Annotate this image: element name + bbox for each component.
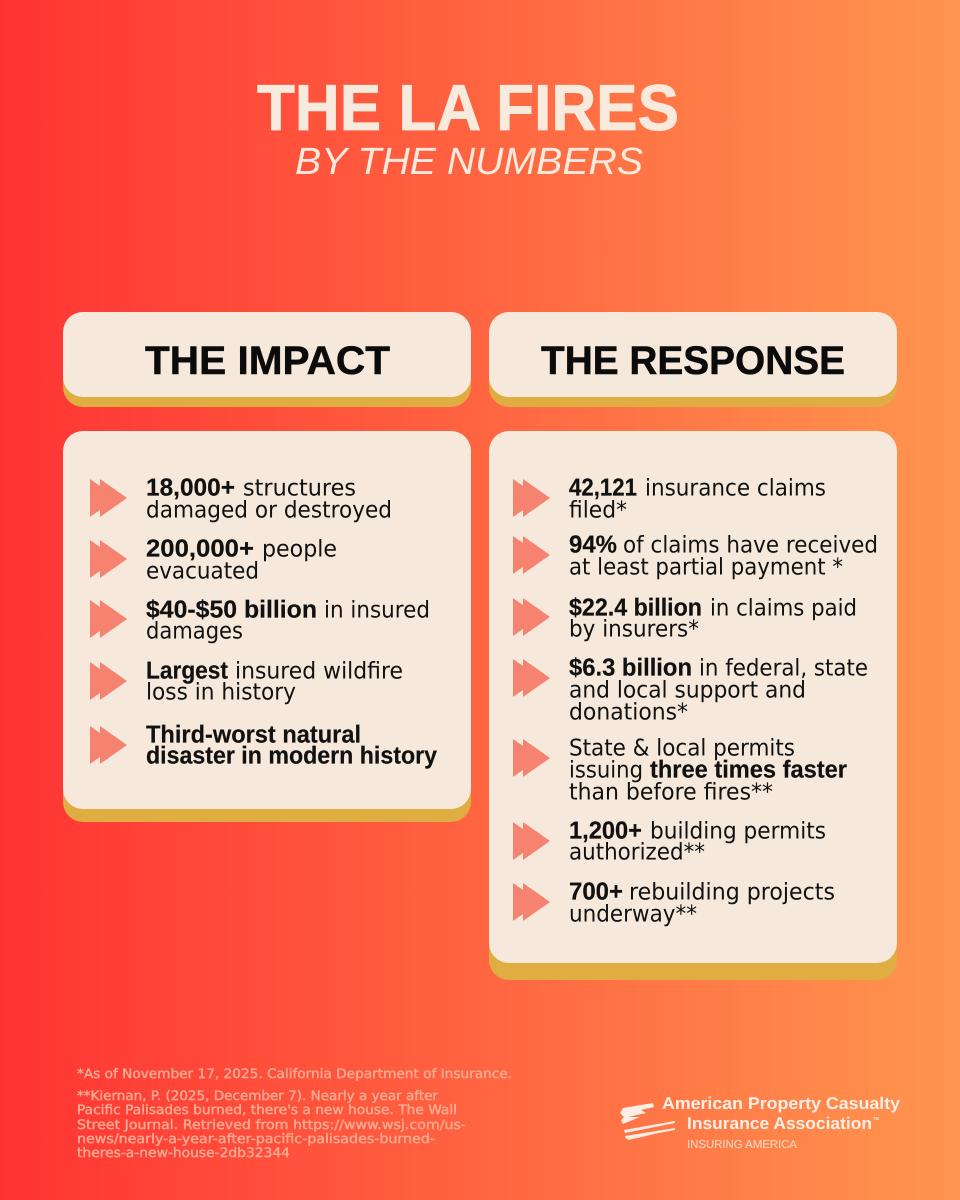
response item: faster permits: than before fires** (569, 780, 773, 806)
response item: faster permits: issuing (569, 758, 643, 784)
impact item: third-worst disaster: disaster in modern history (146, 742, 437, 770)
footnotes (77, 1067, 512, 1161)
impact item: insured damages: in insured (324, 598, 430, 624)
response item: claims paid (513, 594, 857, 642)
response item: rebuilding projects (513, 878, 835, 928)
impact item: evacuated: evacuated (146, 558, 259, 584)
impact item: largest loss: loss in history (146, 680, 296, 706)
impact item: insured damages (90, 596, 430, 644)
footnotes: *As of November 17, 2025. California Department of Insurance. (77, 1067, 512, 1082)
footnotes: Street Journal. Retrieved from https://www.wsj.com/us- (77, 1118, 466, 1133)
subtitle: BY THE NUMBERS (295, 141, 643, 183)
panel: the impact heading: THE IMPACT (145, 339, 390, 383)
title: THE LA FIRES (257, 71, 679, 144)
impact item: largest loss (90, 658, 403, 706)
response item: partial payment: of claims have received (623, 532, 878, 558)
response item: partial payment: 94% (569, 532, 617, 558)
response item: support and donations: and local support and (569, 678, 806, 704)
title (257, 71, 679, 183)
footnotes: Pacific Palisades burned, there's a new house. The Wall (77, 1103, 457, 1118)
response item: claims filed: 42,121 (569, 474, 637, 502)
impact item: evacuated: people (262, 536, 337, 562)
response item: claims filed: filed* (569, 498, 627, 524)
panel: the response heading (489, 312, 897, 407)
response item: permits authorized: 1,200+ (569, 818, 642, 844)
logo: American Property Casualty Insurance Association: Insurance Association (687, 1114, 872, 1133)
impact item: structures: structures (243, 476, 356, 502)
response item: rebuilding projects: 700+ (569, 878, 623, 906)
footnotes: theres-a-new-house-2db32344 (77, 1146, 290, 1161)
impact item: structures (90, 474, 392, 524)
impact item: insured damages: $40-$50 billion (146, 596, 317, 624)
response item: claims paid: by insurers* (569, 616, 699, 642)
response item: support and donations (513, 654, 868, 726)
response item: partial payment (513, 532, 878, 580)
impact item: evacuated: 200,000+ (146, 536, 254, 562)
impact item: structures: 18,000+ (146, 474, 235, 502)
logo: American Property Casualty Insurance Association (620, 1094, 901, 1151)
impact item: third-worst disaster: Third-worst natural (146, 722, 361, 748)
logo: American Property Casualty Insurance Association: INSURING AMERICA (687, 1139, 797, 1151)
impact item: insured damages: damages (146, 618, 243, 644)
impact item: largest loss: insured wildfire (235, 658, 403, 684)
response item: claims paid: $22.4 billion (569, 594, 702, 622)
response item: faster permits: State & local permits (569, 736, 795, 762)
response item: faster permits (513, 736, 847, 806)
impact item: structures: damaged or destroyed (146, 498, 392, 524)
panel: the impact heading (63, 312, 471, 407)
impact item: largest loss: Largest (146, 658, 228, 684)
response item: permits authorized (513, 818, 826, 866)
panel: the response heading: THE RESPONSE (541, 339, 845, 383)
logo: American Property Casualty Insurance Association: American Property Casualty (662, 1094, 901, 1113)
response item: rebuilding projects: rebuilding projects (629, 880, 835, 906)
response item: support and donations: $6.3 billion (569, 654, 692, 682)
response item: claims filed (513, 474, 826, 524)
response item: permits authorized: building permits (650, 818, 826, 844)
footnotes: news/nearly-a-year-after-pacific-palisades-burned- (77, 1132, 435, 1147)
logo: American Property Casualty Insurance Association: TM (873, 1116, 879, 1121)
response item: support and donations: donations* (569, 700, 688, 726)
icon: logo swoosh (620, 1103, 675, 1140)
response item: claims paid: in claims paid (710, 596, 857, 622)
response item: faster permits: three times faster (650, 756, 847, 784)
response item: rebuilding projects: underway** (569, 902, 697, 928)
impact item: evacuated (90, 536, 337, 584)
response item: claims filed: insurance claims (645, 476, 826, 502)
panel: impact list (63, 431, 471, 822)
footnotes: **Kiernan, P. (2025, December 7). Nearly a year after (77, 1089, 439, 1104)
response item: partial payment: at least partial payment * (569, 554, 843, 580)
impact item: third-worst disaster (90, 722, 437, 770)
response item: permits authorized: authorized** (569, 840, 705, 866)
response item: support and donations: in federal, state (699, 656, 868, 682)
panel: response list (489, 431, 897, 980)
